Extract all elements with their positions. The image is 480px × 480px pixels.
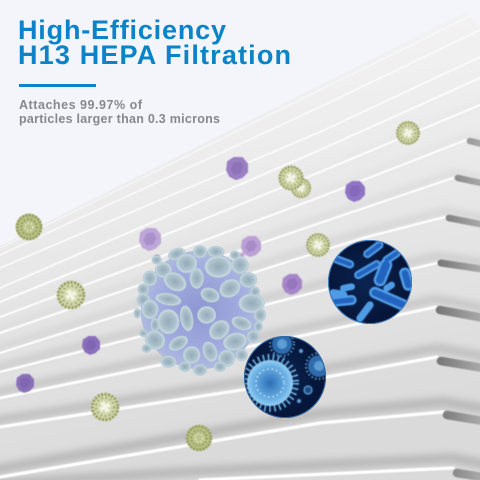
virus body <box>141 251 259 369</box>
heading rule <box>19 84 96 87</box>
heading <box>18 15 291 70</box>
large virus <box>134 246 266 375</box>
green pollen particles <box>16 121 420 451</box>
heading: H13 HEPA Filtration <box>18 40 291 70</box>
virus spikes <box>134 246 266 375</box>
subtitle <box>19 98 220 126</box>
bacteria circle <box>328 240 412 324</box>
bacteria rods outer <box>333 245 408 318</box>
subtitle: Attaches 99.97% of <box>19 98 143 112</box>
main blue virus <box>244 357 296 409</box>
subtitle: particles larger than 0.3 microns <box>19 112 220 126</box>
bacteria rods inner <box>335 245 408 305</box>
heading: High-Efficiency <box>18 15 226 45</box>
virus circle <box>244 336 326 418</box>
purple particles <box>16 157 365 393</box>
filter frame stubs <box>440 141 480 479</box>
